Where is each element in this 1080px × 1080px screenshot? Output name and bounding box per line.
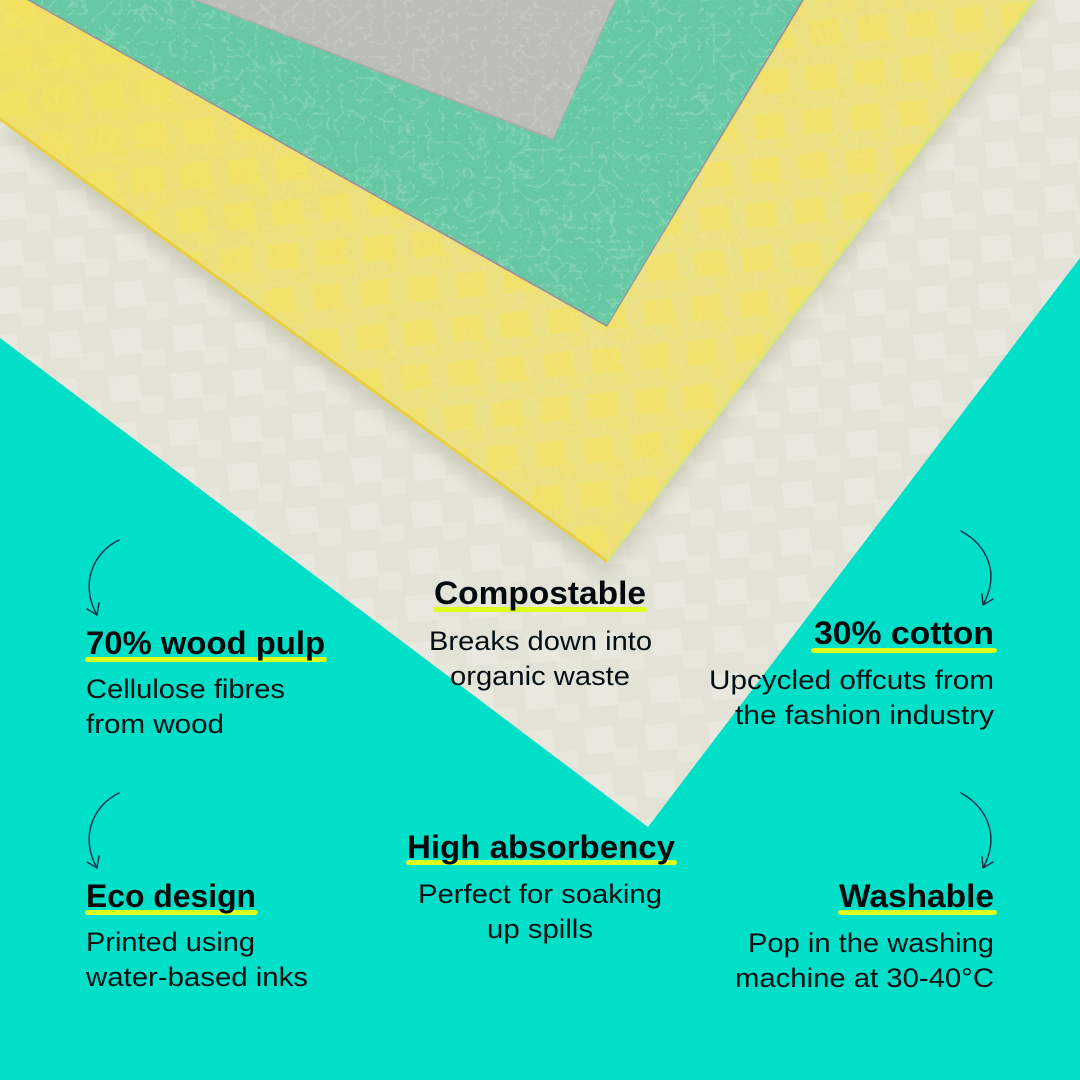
text: high absorbency: Perfect for soaking — [418, 879, 662, 909]
text: cotton: Upcycled offcuts from — [709, 665, 994, 695]
text: high absorbency: up spills — [487, 914, 593, 944]
arrow: wood pulp — [87, 540, 119, 615]
underline: cotton — [811, 648, 997, 653]
underline: washable — [838, 910, 997, 915]
heading: compostable: Compostable — [434, 575, 646, 611]
yellow cloth — [0, 0, 1080, 600]
heading: washable: Washable — [839, 878, 994, 914]
text: eco design: water-based inks — [85, 962, 308, 992]
feature: eco design — [85, 793, 308, 992]
text: compostable: Breaks down into — [429, 626, 652, 656]
feature: 70% wood pulp — [85, 540, 327, 739]
feature: washable — [735, 793, 997, 993]
feature: 30% cotton — [709, 531, 997, 730]
underline: high absorbency — [406, 860, 677, 865]
text: wood pulp: from wood — [86, 709, 224, 739]
heading: wood pulp: 70% wood pulp — [86, 625, 325, 661]
heading: high absorbency: High absorbency — [407, 829, 675, 865]
feature: compostable — [429, 575, 652, 691]
grey cloth — [194, 0, 616, 140]
underline: eco design — [85, 910, 258, 915]
text: eco design: Printed using — [86, 927, 255, 957]
heading: eco design: Eco design — [86, 878, 256, 914]
underline: wood pulp — [85, 657, 327, 662]
text: compostable: organic waste — [450, 661, 630, 691]
underline: compostable — [433, 607, 647, 612]
arrow: eco design — [87, 793, 119, 868]
text: wood pulp: Cellulose fibres — [86, 674, 285, 704]
text: cotton: the fashion industry — [735, 700, 995, 730]
text: washable: machine at 30-40°C — [735, 963, 994, 993]
heading: cotton: 30% cotton — [814, 615, 994, 651]
green cloth — [27, 0, 804, 327]
teal background panel — [0, 258, 1080, 1080]
arrow: cotton — [961, 531, 993, 605]
feature: high absorbency — [406, 829, 677, 944]
text: washable: Pop in the washing — [748, 928, 994, 958]
arrow: washable — [961, 793, 993, 868]
